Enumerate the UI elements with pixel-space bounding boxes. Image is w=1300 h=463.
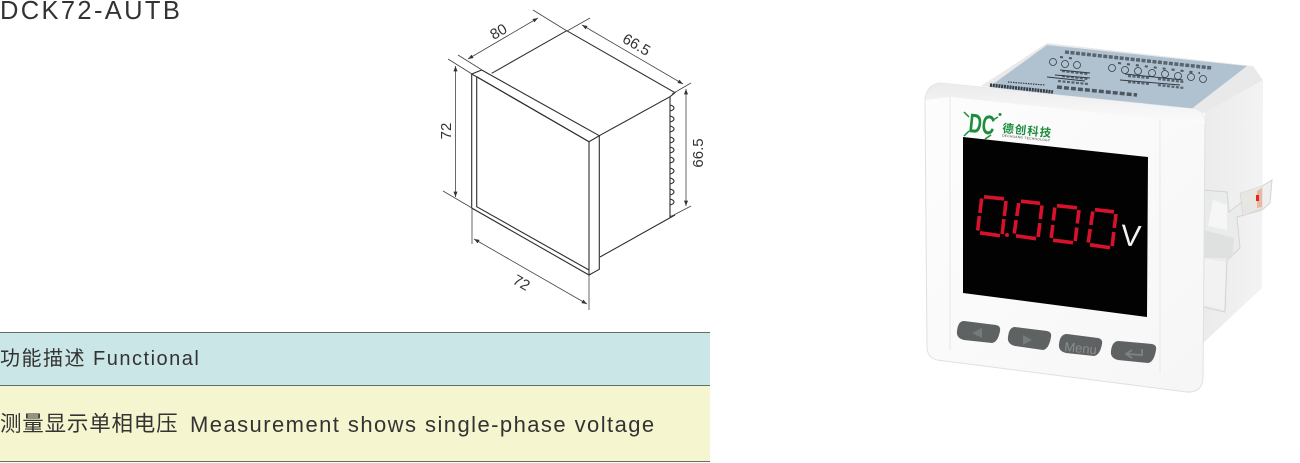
meter body side [1202, 80, 1263, 344]
header row [0, 332, 710, 386]
bezel top lip [926, 83, 1205, 124]
device outline [472, 31, 675, 275]
dimension labels: 80 [487, 21, 510, 44]
dimension labels [438, 21, 707, 295]
brand logo: DC [967, 107, 996, 141]
brand logo: DECHUANG TECHNOLOGY [1002, 134, 1051, 143]
button: menu: Menu [1064, 339, 1098, 357]
button: left [957, 321, 1000, 343]
dimension labels: 66.5 [619, 30, 653, 60]
unit V: V [1119, 219, 1142, 254]
dimension labels: 72 [438, 123, 455, 139]
header row: 功能描述 Functional [0, 348, 200, 370]
product photo: panel meter [924, 43, 1272, 392]
top rating label [989, 45, 1247, 110]
button: enter [1111, 341, 1156, 363]
display screen [963, 137, 1148, 317]
button: menu [1059, 334, 1102, 357]
English text: Measurement shows single-phase voltage [190, 412, 656, 437]
brand logo [964, 107, 1053, 143]
dimension lines [443, 10, 691, 310]
dimension labels: 72 [510, 272, 533, 295]
brand logo: 德创科技 [1002, 121, 1053, 140]
content row [0, 386, 710, 462]
meter body top [981, 43, 1263, 113]
bezel inner shading [950, 97, 1160, 374]
Chinese text: 测量显示单相电压 [0, 412, 178, 436]
dimension drawing [438, 10, 707, 310]
dimension labels: 66.5 [690, 138, 707, 168]
front bezel [925, 83, 1205, 392]
transparent mounting clip [1203, 180, 1272, 312]
seven-segment reading 0.000 [978, 197, 1116, 248]
button: right [1008, 327, 1051, 350]
label print [990, 52, 1212, 95]
table: function description [0, 332, 710, 462]
